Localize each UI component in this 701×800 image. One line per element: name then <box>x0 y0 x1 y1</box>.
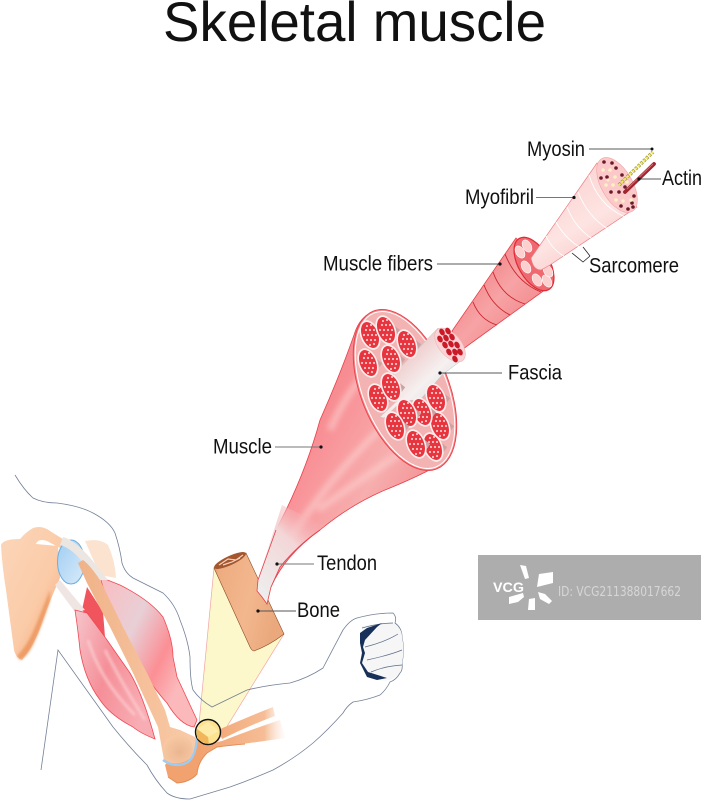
triceps tendon <box>55 580 85 612</box>
watermark logo <box>493 565 553 610</box>
label: Muscle fibers: Muscle fibers <box>323 252 433 276</box>
label: Fascia: Fascia <box>508 362 562 384</box>
yellow magnification cone <box>199 568 284 741</box>
pale myofilaments <box>601 168 633 203</box>
shoulder tendons <box>60 537 108 580</box>
ulna <box>165 720 285 783</box>
label: Fascia <box>438 362 562 384</box>
label: Muscle <box>213 436 323 458</box>
fist <box>360 623 404 680</box>
myosin filament <box>619 152 653 185</box>
humerus <box>78 560 196 763</box>
triceps <box>75 610 155 739</box>
shoulder and upper arm <box>1 527 197 765</box>
muscle fiber cone <box>452 231 562 349</box>
dark myofilaments <box>599 160 636 211</box>
scapula lower edge <box>17 590 50 660</box>
myofibril cone <box>531 151 654 270</box>
label: Bone <box>256 599 340 622</box>
label: Muscle fibers <box>323 252 502 276</box>
label: Myofibril: Myofibril <box>465 186 534 209</box>
actin filament <box>625 164 654 192</box>
watermark <box>478 555 701 620</box>
rear shoulder bone <box>85 540 116 578</box>
label: Muscle: Muscle <box>213 436 272 458</box>
label: Myosin <box>527 138 654 161</box>
magnifier circle <box>196 720 220 744</box>
thumb shadow <box>360 623 387 680</box>
arm outline <box>15 475 404 799</box>
label: Sarcomere <box>572 247 679 278</box>
label: Myosin: Myosin <box>527 138 585 161</box>
fiber holes <box>513 238 555 289</box>
watermark logo: VCG <box>493 579 524 595</box>
forearm bones <box>165 707 285 783</box>
label: Tendon: Tendon <box>317 552 377 575</box>
label: Bone: Bone <box>297 599 340 622</box>
fascia red fibres <box>436 327 464 363</box>
humeral head cartilage <box>58 540 84 584</box>
fingers <box>361 623 404 680</box>
fascia tube <box>380 323 471 418</box>
muscle belly <box>258 312 437 587</box>
triceps deep head <box>82 587 105 637</box>
biceps <box>100 577 197 727</box>
muscle fascicles <box>353 312 455 465</box>
tendon <box>257 505 325 604</box>
label: Actin <box>637 167 701 190</box>
elbow bone shading <box>163 735 193 763</box>
radius <box>218 707 275 739</box>
elbow cartilage <box>163 733 197 765</box>
label: Tendon <box>275 552 377 575</box>
triceps highlights <box>88 640 145 720</box>
scapula <box>1 527 66 660</box>
whole muscle <box>257 295 478 604</box>
label: Sarcomere: Sarcomere <box>589 254 679 278</box>
cross-section <box>332 295 478 485</box>
bone section <box>212 549 284 651</box>
